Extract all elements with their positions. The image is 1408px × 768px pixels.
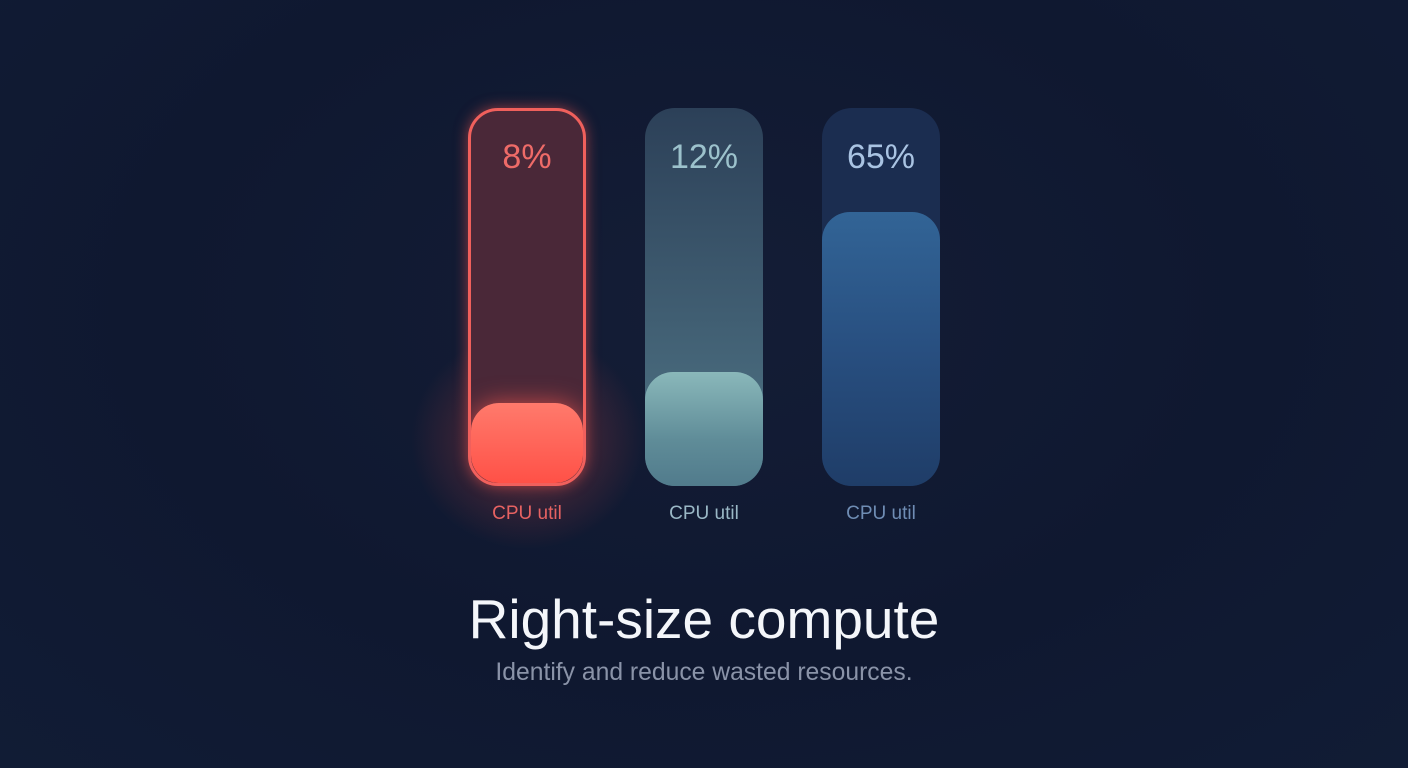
bar: 65% blue [822,108,940,486]
glow: red bar [410,330,645,550]
fill: blue [822,212,940,486]
label: 65%: 65% [847,138,915,176]
fill: red [471,403,583,483]
caption: CPU util blue: CPU util [846,503,916,524]
caption: CPU util red: CPU util [492,503,562,524]
subtitle: Identify and reduce wasted resources. [495,659,913,686]
label: 8%: 8% [502,138,552,176]
label: 12%: 12% [670,138,738,176]
bar: 8% red [468,108,586,486]
title: Right-size compute [469,588,939,650]
fill: teal [645,372,763,486]
caption: CPU util teal: CPU util [669,503,739,524]
bar: 12% teal [645,108,763,486]
